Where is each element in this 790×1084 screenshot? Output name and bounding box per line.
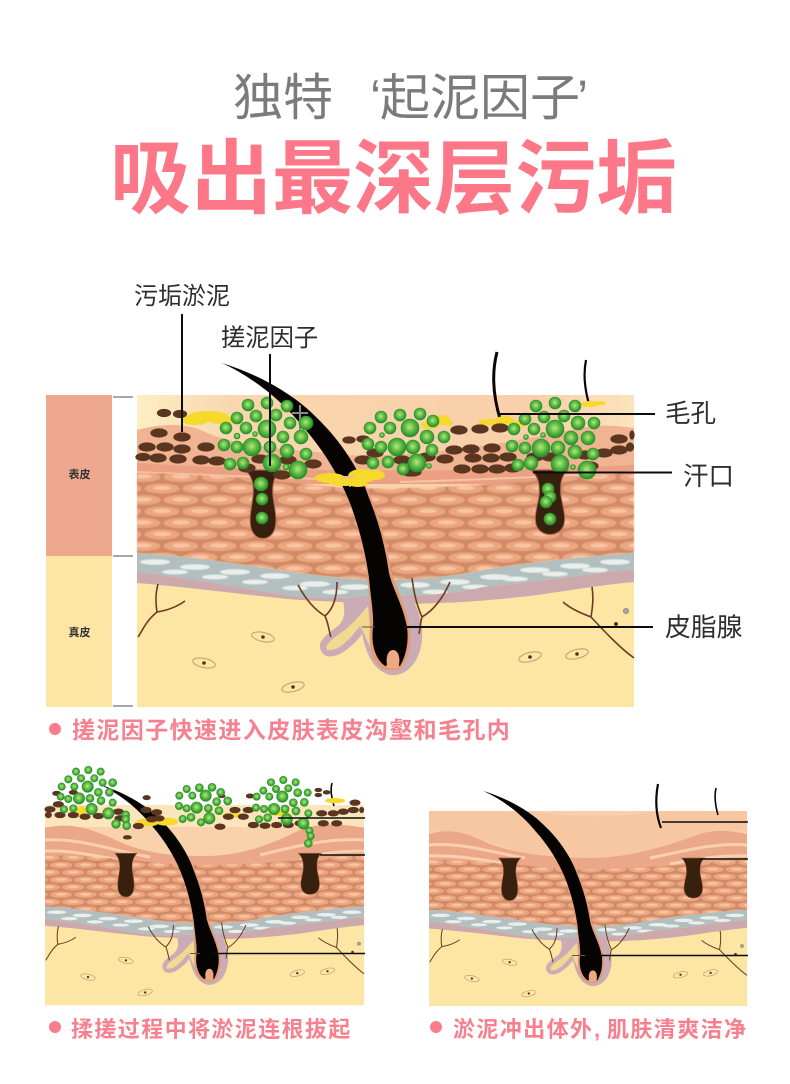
label: 污垢淤泥: 污垢淤泥 (134, 283, 230, 310)
panel: skin layer legend: 表皮 (68, 467, 90, 481)
leader lines (190, 818, 365, 954)
caption: bottom right: 肌肤清爽洁净 (607, 1017, 747, 1042)
title: subtitle: 独特 (233, 70, 333, 126)
hair cross mark (292, 405, 308, 430)
panel: bottom right diagram (429, 784, 748, 1006)
panel: main skin diagram (134, 283, 743, 707)
hair crack (342, 476, 354, 486)
green balls: right cluster and pore (506, 397, 600, 525)
caption: bottom right: , (594, 1017, 602, 1042)
panel: bottom left diagram (45, 766, 365, 1005)
caption: bottom right (430, 1017, 747, 1042)
leader lines (572, 822, 748, 956)
green balls and dirt (45, 766, 364, 847)
panel: skin layer legend (46, 395, 133, 707)
hair stubs (656, 784, 718, 828)
green balls: pore left and middle cluster (254, 408, 450, 524)
title: subtitle: 起泥因子 (380, 70, 580, 126)
label: 汗口: 汗口 (683, 463, 734, 491)
caption: main diagram: 搓泥因子快速进入皮肤表皮沟壑和毛孔内 (72, 717, 511, 743)
title: subtitle (233, 70, 588, 126)
hair stub (331, 783, 334, 806)
hair stubs on skin (494, 352, 589, 422)
label: 皮脂腺: 皮脂腺 (665, 613, 743, 642)
title: main heading: 吸出最深层污垢 (110, 135, 677, 225)
panel: skin layer legend: 真皮 (68, 625, 90, 639)
title: subtitle: ‘ (370, 70, 381, 126)
title: subtitle: ’ (577, 70, 588, 126)
leader lines (182, 314, 672, 627)
label: 搓泥因子: 搓泥因子 (221, 325, 318, 352)
green balls: cluster left (218, 397, 313, 479)
label: 毛孔: 毛孔 (665, 400, 716, 428)
dirt particles (136, 410, 634, 479)
yellow oil (181, 401, 606, 487)
caption: bottom right: 淤泥冲出体外 (453, 1017, 593, 1042)
caption: bottom left: 揉搓过程中将淤泥连根拔起 (71, 1017, 352, 1042)
